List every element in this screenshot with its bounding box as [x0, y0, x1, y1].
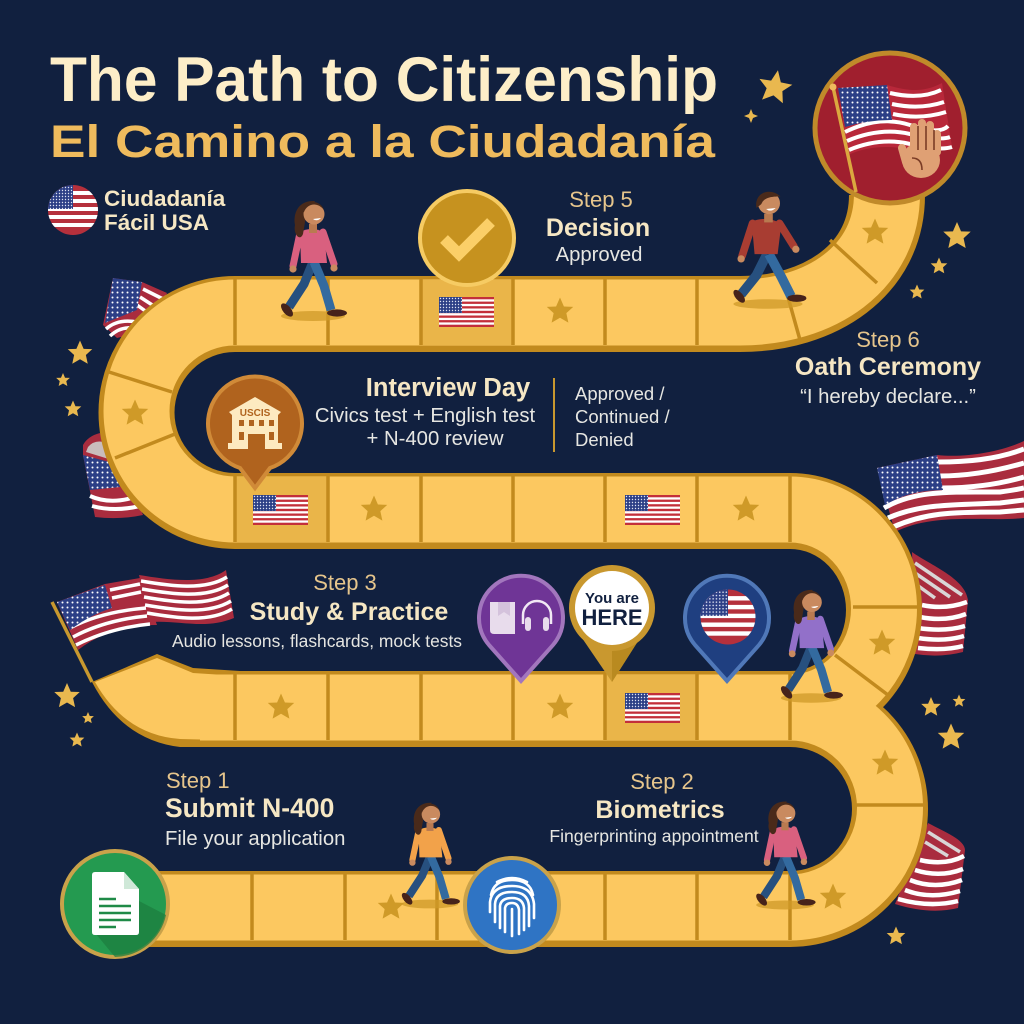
text: step 6 oath ceremony: “I hereby declare...” — [800, 386, 976, 408]
text: step 2 biometrics: Biometrics — [595, 796, 725, 824]
text: step 2 biometrics: Fingerprinting appointment — [549, 826, 759, 846]
text: interview outcomes: Approved / — [575, 383, 665, 404]
text: interview day: Interview Day — [366, 374, 531, 402]
winding board-game road — [92, 194, 925, 940]
text: step 1 submit N-400 — [165, 768, 345, 850]
logo: Ciudadanía Fácil USA: Ciudadanía — [104, 186, 226, 211]
text: step 6 oath ceremony: Oath Ceremony — [795, 353, 981, 381]
walker: woman in pink, bottom row — [754, 801, 816, 910]
text: interview day — [315, 374, 536, 450]
pin: You are HERE: You are — [585, 590, 639, 607]
pin: USCIS building — [208, 376, 302, 488]
text: interview outcomes: Continued / — [575, 406, 670, 427]
decorative gold stars — [54, 67, 971, 944]
small flags on road tiles — [253, 297, 680, 723]
text: interview outcomes — [553, 378, 670, 452]
text: step 5 decision: Step 5 — [569, 187, 633, 212]
pin: You are HERE: HERE — [581, 605, 643, 630]
flag: lower right striped behind road — [895, 823, 965, 911]
flag: large right — [877, 441, 1024, 532]
text: step 3 study and practice: Study & Practice — [250, 598, 448, 626]
text: interview day: Civics test + English test — [315, 405, 536, 427]
icon: green document medallion — [62, 851, 168, 957]
walker: woman in purple — [779, 590, 843, 703]
text: step 1 submit N-400: Submit N-400 — [165, 793, 334, 823]
pin: USCIS building: USCIS — [240, 408, 271, 419]
pin: You are HERE — [569, 565, 655, 682]
flag: right striped behind road — [912, 552, 968, 656]
tile dividers — [109, 240, 925, 940]
text: interview outcomes: Denied — [575, 429, 634, 450]
text: step 3 study and practice: Step 3 — [313, 570, 377, 595]
flag: left behind road — [83, 433, 143, 518]
icon: decision checkmark medallion — [420, 191, 514, 285]
pin: round American flag — [685, 576, 769, 681]
icon: blue fingerprint medallion — [465, 858, 559, 952]
text: interview day: + N-400 review — [367, 428, 504, 450]
text: step 5 decision: Approved — [556, 244, 642, 266]
stars on road tiles — [122, 218, 898, 919]
logo: Ciudadanía Fácil USA: Fácil USA — [104, 210, 209, 235]
highlighted tiles — [235, 280, 697, 740]
text: step 6 oath ceremony: Step 6 — [856, 327, 920, 352]
text: step 2 biometrics — [549, 769, 759, 846]
pin: study book and headphones — [479, 576, 563, 681]
text: step 3 study and practice — [172, 570, 462, 651]
walker: woman in pink, top row — [279, 201, 347, 321]
subtitle: El Camino a la Ciudadanía — [50, 116, 716, 167]
title: The Path to Citizenship — [50, 45, 718, 115]
text: step 1 submit N-400: Step 1 — [166, 768, 230, 793]
flag: upper left behind road — [103, 278, 167, 338]
text: step 5 decision: Decision — [546, 214, 650, 242]
text: step 6 oath ceremony — [795, 327, 981, 408]
walker: woman in orange — [400, 803, 460, 908]
text: step 3 study and practice: Audio lessons, flashcards, mock tests — [172, 631, 462, 651]
text: step 5 decision — [546, 187, 650, 266]
text: step 2 biometrics: Step 2 — [630, 769, 694, 794]
logo: Ciudadanía Fácil USA — [48, 185, 226, 235]
left flag on pole — [52, 570, 234, 682]
walker: man in red — [731, 192, 806, 309]
text: step 1 submit N-400: File your application — [165, 828, 345, 850]
icon: oath medallion with flag and raised hand — [815, 53, 965, 203]
